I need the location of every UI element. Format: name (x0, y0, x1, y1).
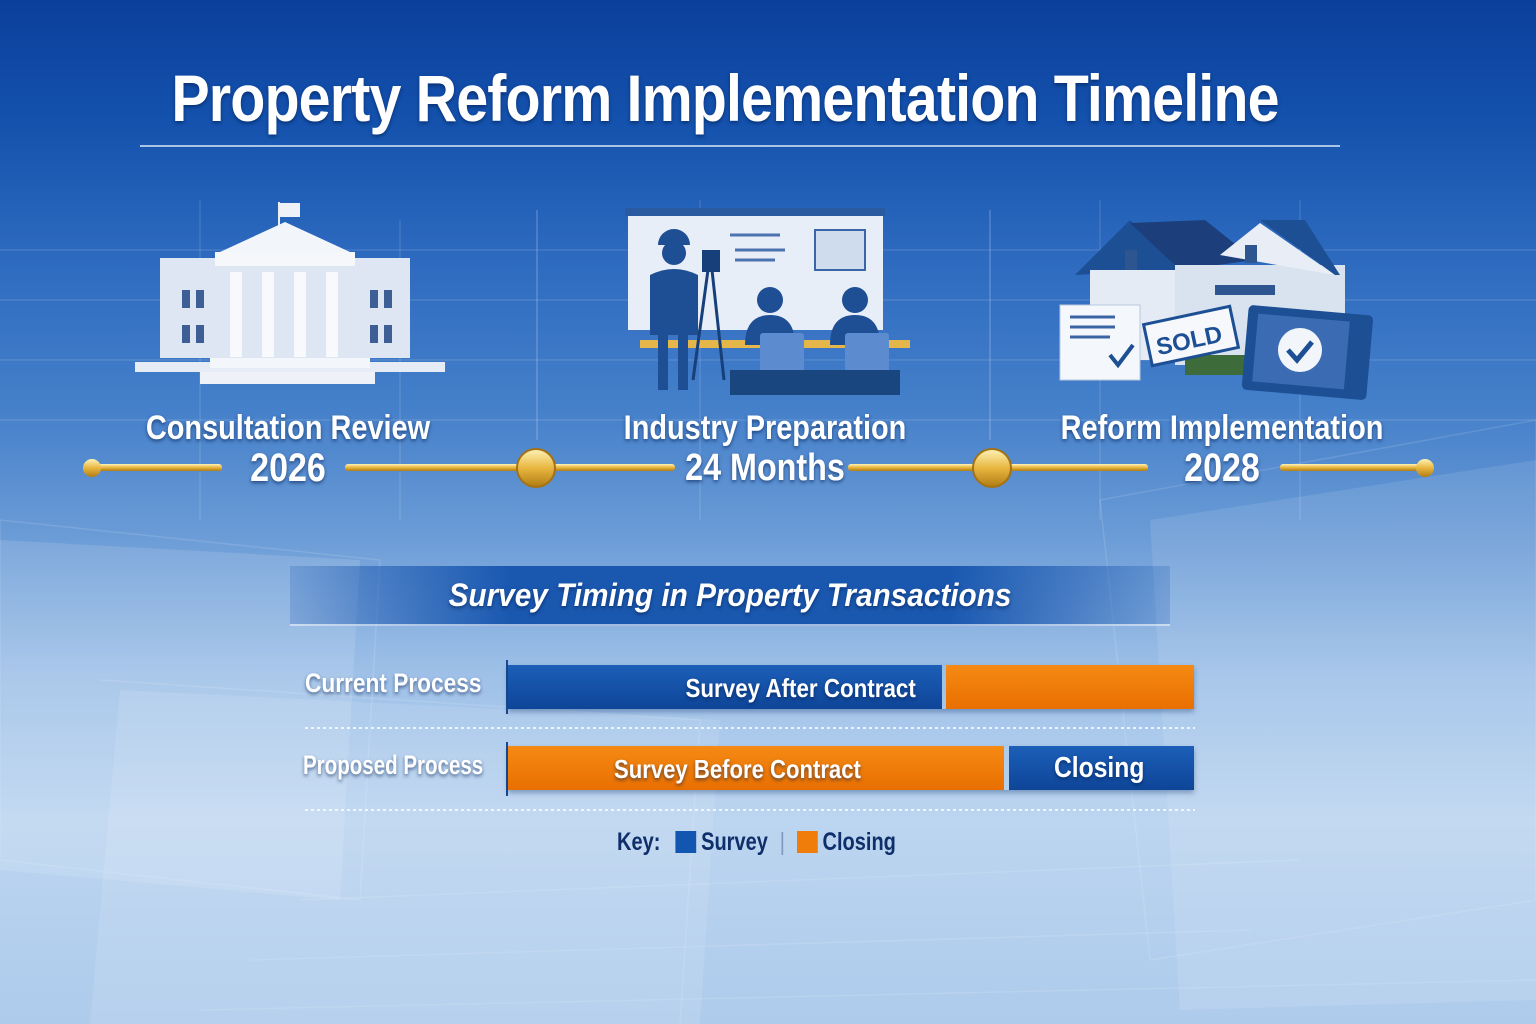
legend: Key: Survey | Closing (617, 828, 896, 856)
label: industry preparation: 24 Months (685, 447, 845, 489)
node 1 (517, 449, 555, 487)
chart title: Survey Timing in Property Transactions (449, 577, 1011, 613)
title: Property Reform Implementation Timeline (171, 61, 1279, 135)
label: reform implementation: 2028 (1184, 446, 1260, 490)
label: industry preparation (623, 409, 907, 489)
bar: proposed process: Survey Before Contract (614, 754, 861, 784)
bar: proposed process: Closing (1054, 752, 1144, 784)
label: consultation review: 2026 (250, 446, 326, 490)
bar: current process (508, 665, 1194, 709)
icon: house sold: SOLD (1154, 321, 1225, 361)
bar: current process: Survey After Contract (686, 673, 916, 703)
label: consultation review: Consultation Review (146, 409, 430, 447)
label: industry preparation: Industry Preparation (624, 409, 906, 447)
row label: proposed process: Proposed Process (303, 750, 483, 780)
node 2 (973, 449, 1011, 487)
label: reform implementation: Reform Implementation (1061, 409, 1383, 447)
icon: government building (135, 202, 445, 384)
label: consultation review (145, 409, 432, 490)
chart header band (290, 566, 1170, 626)
icon: training presentation (625, 208, 910, 395)
label: reform implementation (1060, 409, 1384, 490)
timeline (83, 448, 1434, 488)
bar: proposed process (508, 746, 1194, 790)
row label: current process: Current Process (305, 668, 481, 698)
icon: house sold (1060, 220, 1373, 400)
